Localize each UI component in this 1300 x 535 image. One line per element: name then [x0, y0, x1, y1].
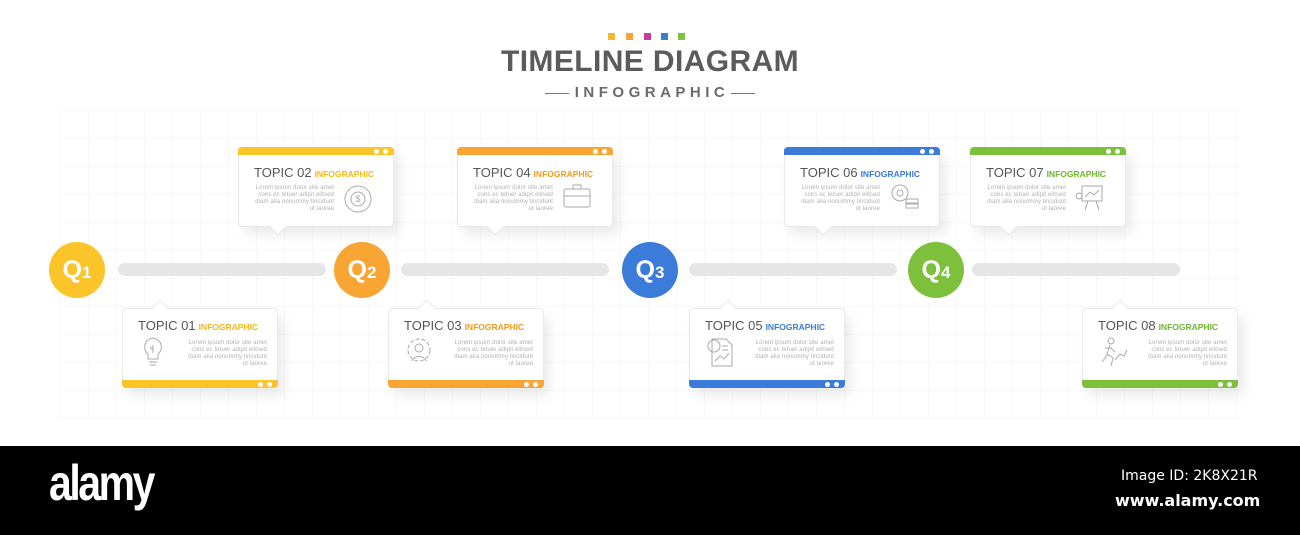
icon: briefcase: [564, 184, 590, 208]
card: topic 01: Lorem ipsum dolor site amet cons ec tetuer adipit elitsed diam alia nonummy tincidunt ut laoree: [188, 340, 267, 367]
card: topic 08: TOPIC 08 INFOGRAPHIC: [1098, 318, 1218, 333]
marker Q3: [622, 242, 678, 298]
card: topic 04: Lorem ipsum dolor site amet cons ec tetuer adipit elitsed diam alia nonummy tincidunt ut laoree: [474, 185, 553, 212]
icon: presentation: [1076, 186, 1102, 210]
marker Q3: Q3: [636, 256, 664, 284]
icon: running businessman: [1102, 338, 1128, 366]
card: topic 04: [457, 147, 613, 227]
card: topic 08: [1082, 308, 1238, 388]
website: www.alamy.com: [1115, 491, 1260, 510]
marker Q1: Q1: [63, 256, 91, 284]
marker Q1: [49, 242, 105, 298]
image id: Image ID: 2K8X21R: [1121, 468, 1258, 484]
card: topic 07: [970, 147, 1126, 227]
card: topic 07: Lorem ipsum dolor site amet cons ec tetuer adipit elitsed diam alia nonummy tincidunt ut laoree: [987, 185, 1066, 212]
card: topic 06: [784, 147, 940, 227]
title: TIMELINE DIAGRAM: [501, 45, 799, 78]
icon: gear person: [408, 338, 430, 362]
icon: light bulb: [144, 338, 162, 366]
card: topic 07: TOPIC 07 INFOGRAPHIC: [986, 165, 1106, 180]
card: topic 06: TOPIC 06 INFOGRAPHIC: [800, 165, 920, 180]
icon: dollar cycle: $: [355, 194, 361, 204]
header color dots: [608, 33, 685, 40]
icon: gear coins: [892, 184, 918, 208]
footer bar: [0, 446, 1300, 535]
card: topic 02: [238, 147, 394, 227]
card: topic 02: TOPIC 02 INFOGRAPHIC: [254, 165, 374, 180]
timeline track segments: [118, 263, 1180, 276]
card: topic 03: [388, 308, 544, 388]
marker Q4: Q4: [922, 256, 950, 284]
card: topic 05: Lorem ipsum dolor site amet cons ec tetuer adipit elitsed diam alia nonummy tincidunt ut laoree: [755, 340, 834, 367]
marker Q4: [908, 242, 964, 298]
card: topic 03: TOPIC 03 INFOGRAPHIC: [404, 318, 524, 333]
card: topic 01: [122, 308, 278, 388]
card: topic 01: TOPIC 01 INFOGRAPHIC: [138, 318, 258, 333]
card: topic 04: TOPIC 04 INFOGRAPHIC: [473, 165, 593, 180]
card: topic 05: [689, 308, 845, 388]
icon: dollar cycle: [344, 186, 372, 212]
subtitle: INFOGRAPHIC: [575, 84, 729, 101]
card: topic 02: Lorem ipsum dolor site amet cons ec tetuer adipit elitsed diam alia nonummy tincidunt ut laoree: [255, 185, 334, 212]
logo: alamy: alamy: [49, 455, 153, 511]
card: topic 03: Lorem ipsum dolor site amet cons ec tetuer adipit elitsed diam alia nonummy tincidunt ut laoree: [454, 340, 533, 367]
card: topic 08: Lorem ipsum dolor site amet cons ec tetuer adipit elitsed diam alia nonummy tincidunt ut laoree: [1148, 340, 1227, 367]
card: topic 05: TOPIC 05 INFOGRAPHIC: [705, 318, 825, 333]
marker Q2: Q2: [348, 256, 376, 284]
icon: report: [708, 338, 732, 366]
marker Q2: [334, 242, 390, 298]
card: topic 06: Lorem ipsum dolor site amet cons ec tetuer adipit elitsed diam alia nonummy tincidunt ut laoree: [801, 185, 880, 212]
